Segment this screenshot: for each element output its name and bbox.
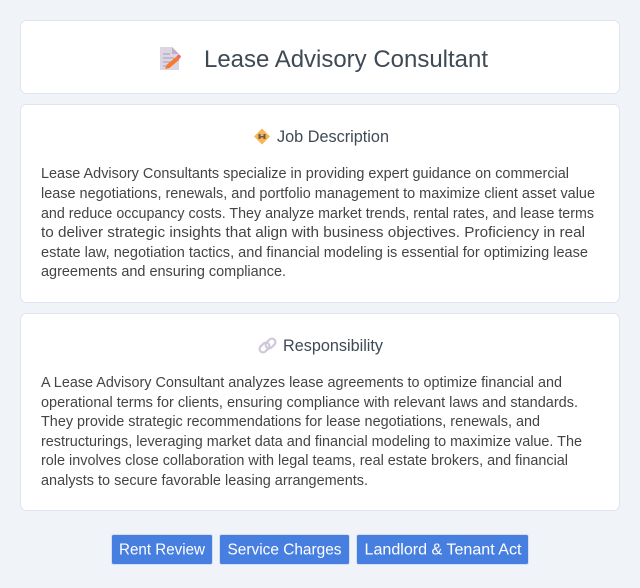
tag: Rent Review [112, 534, 212, 564]
icon: chain link [258, 337, 277, 354]
responsibility body text: A Lease Advisory Consultant analyzes lease agreements to optimize financial and [41, 375, 562, 391]
responsibility body text: restructurings, leveraging market data and financial modeling to maximize value. The [41, 434, 582, 450]
tag: Landlord & Tenant Act [356, 534, 528, 564]
tag: Rent Review: Rent Review [119, 542, 206, 558]
job description body text: agreements and ensuring compliance. [41, 264, 286, 280]
panel: title [20, 20, 620, 94]
panel: job description [20, 104, 620, 302]
icon: diamond road sign [254, 128, 270, 144]
icon: document with pencil [160, 47, 181, 70]
job description body text: estate law, negotiation tactics, and financial modeling is essential for optimizing lease [41, 245, 588, 261]
responsibility body text: operational terms for clients, ensuring compliance with relevant laws and standards. [41, 395, 578, 411]
job description body text: and reduce occupancy costs. They analyze market trends, rental rates, and lease terms [41, 206, 594, 222]
tag: Landlord & Tenant Act: Landlord & Tenant Act [364, 542, 522, 558]
heading: job description: Job Description [277, 127, 389, 146]
tag: Service Charges: Service Charges [228, 542, 342, 558]
panel: responsibility [20, 314, 620, 510]
responsibility body text: role involves close collaboration with legal teams, real estate brokers, and financial [41, 453, 568, 469]
responsibility body text: They provide strategic recommendations for lease negotiations, renewals, and [41, 414, 540, 430]
responsibility body text [41, 375, 582, 489]
job description body text [41, 166, 595, 280]
job description body text: to deliver strategic insights that align with business objectives. Proficiency in real [41, 225, 585, 241]
title text: Lease Advisory Consultant [204, 46, 488, 73]
job description body text: lease negotiations, renewals, and portfolio management to maximize client asset value [41, 186, 595, 202]
tag: Service Charges [220, 534, 350, 564]
job description body text: Lease Advisory Consultants specialize in providing expert guidance on commercial [41, 166, 569, 182]
heading: responsibility: Responsibility [283, 336, 384, 355]
responsibility body text: analysts to secure favorable leasing arrangements. [41, 473, 368, 489]
